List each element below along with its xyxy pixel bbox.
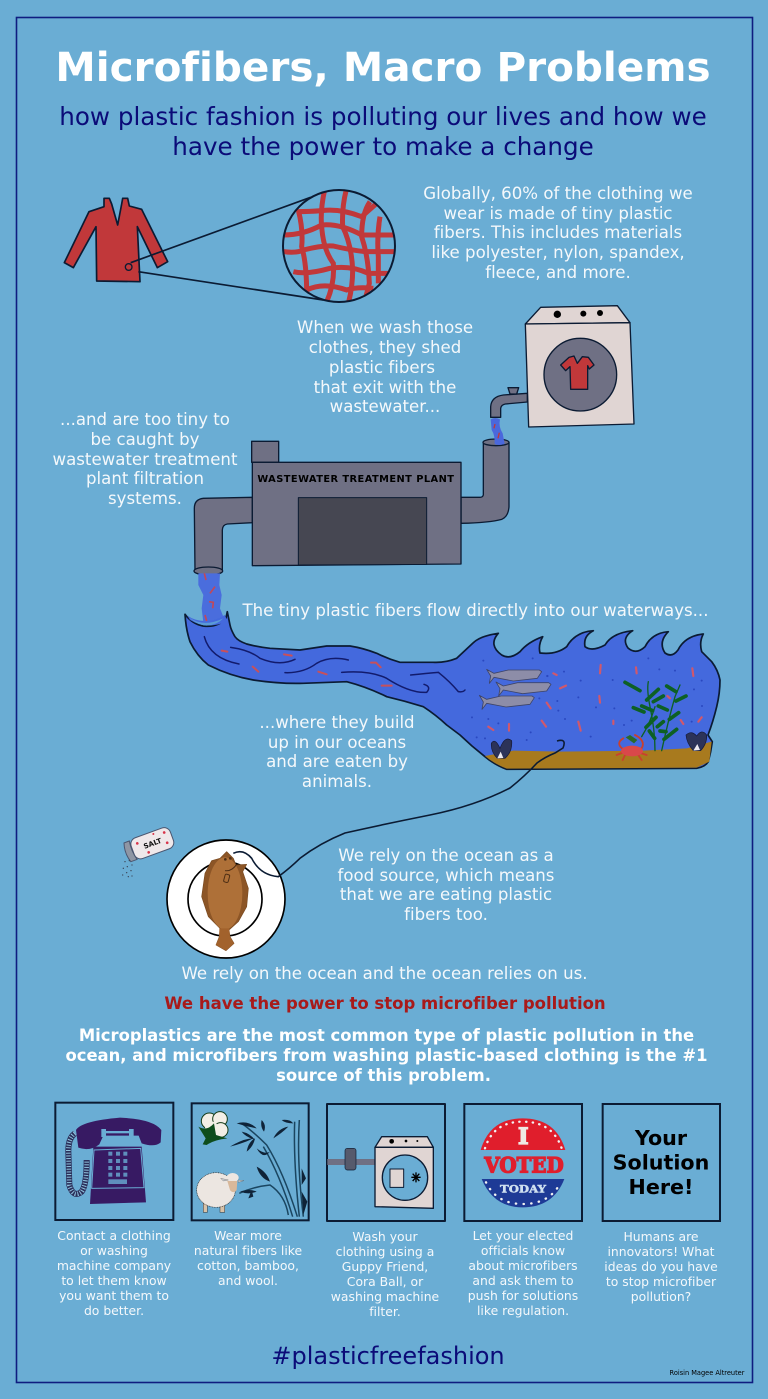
text: 60 percent of clothing: [423, 184, 693, 282]
caption: innovators: [604, 1229, 718, 1304]
water currents: [204, 637, 465, 692]
fishing line: [233, 740, 564, 877]
text: too tiny to be caught: be caught by: [90, 430, 200, 449]
text: ocean as food source: [338, 846, 554, 924]
sea floor: [485, 742, 712, 769]
icon: bamboo: [230, 1120, 307, 1217]
text: tiny fibers flow: The tiny plastic fibers flow directly into our waterways...: [241, 601, 709, 620]
caption: natural fibers: natural fibers like: [194, 1243, 302, 1258]
text: 60 percent of clothing: fibers. This includes materials: [434, 223, 682, 242]
ocean details: [471, 657, 712, 769]
subtitle: have the power to make a change: [172, 132, 594, 161]
caption: wash filter: [331, 1229, 439, 1319]
illustration: plate and flatfish: [167, 840, 285, 958]
text: too tiny to be caught: systems.: [108, 489, 182, 508]
caption: wash filter: clothing using a: [336, 1244, 434, 1259]
key fact: source of this problem.: [276, 1066, 491, 1085]
text: too tiny to be caught: ...and are too tiny to: [60, 410, 230, 429]
key fact: Microplastics are the most common type of plastic pollution in the: [79, 1026, 694, 1045]
action: I voted sticker: VOTED: [483, 1153, 564, 1178]
key fact: ocean, and microfibers from washing plastic-based clothing is the #1: [65, 1046, 708, 1065]
text: ocean as food source: food source, which means: [338, 866, 554, 885]
text: 60 percent of clothing: like polyester, nylon, spandex,: [431, 243, 685, 262]
text: washing sheds fibers: plastic fibers: [329, 358, 435, 377]
action: I voted sticker: [464, 1104, 582, 1221]
text: ocean relies on us: We rely on the ocean and the ocean relies on us.: [181, 964, 588, 983]
icon: cotton: [198, 1112, 228, 1145]
text: too tiny to be caught: wastewater treatment: [53, 450, 238, 469]
caption: contact company: or washing: [80, 1243, 148, 1258]
action: phone: [55, 1103, 173, 1220]
river and ocean water: [185, 612, 720, 769]
caption: wash filter: Guppy Friend,: [342, 1259, 428, 1274]
caption: contact company: to let them know: [61, 1273, 167, 1288]
caption: wash filter: Cora Ball, or: [347, 1274, 424, 1289]
caption: wash filter: washing machine: [331, 1289, 439, 1304]
illustration: river and ocean: [185, 573, 720, 769]
hashtag: #plasticfreefashion: [271, 1342, 505, 1370]
caption: contact company: machine company: [57, 1258, 171, 1273]
illustration: salt: [122, 826, 176, 877]
subtitle: [59, 102, 707, 161]
text: build up in oceans: and are eaten by: [266, 752, 408, 771]
caption: innovators: innovators! What: [607, 1244, 715, 1259]
caption: elected officials: officials know: [481, 1243, 565, 1258]
caption: elected officials: and ask them to: [472, 1273, 574, 1288]
credit: Roisin Magee Altreuter: [670, 1369, 745, 1377]
salt grains: [122, 860, 133, 877]
caption: elected officials: [468, 1228, 578, 1318]
caption: contact company: [57, 1228, 171, 1318]
caption: contact company: do better.: [84, 1303, 144, 1318]
text: build up in oceans: animals.: [302, 772, 372, 791]
text: too tiny to be caught: [53, 410, 238, 508]
caption: natural fibers: [194, 1228, 302, 1288]
text: build up in oceans: ...where they build: [259, 713, 415, 732]
microplastic dots: [471, 657, 703, 741]
icon: wastewater plant: [194, 439, 509, 575]
text: 60 percent of clothing: Globally, 60% of the clothing we: [423, 184, 693, 203]
caption: wash filter: Wash your: [352, 1229, 418, 1244]
waterfall with splash: [187, 573, 227, 626]
text: too tiny to be caught: plant filtration: [86, 469, 204, 488]
icon: flatfish: [202, 852, 248, 951]
action: natural fibers: [192, 1103, 309, 1220]
action: washing filter: [327, 1104, 445, 1221]
icon: washing machine: [525, 306, 634, 427]
icon: drain tap: [491, 388, 527, 417]
action: I voted sticker: TODAY: [500, 1182, 546, 1195]
subtitle: how plastic fashion is polluting our lives and how we: [59, 102, 707, 131]
caption: wash filter: filter.: [369, 1304, 401, 1319]
action: your solution: [603, 1104, 720, 1221]
river details: [187, 573, 465, 692]
text: ocean as food source: that we are eating plastic: [340, 885, 552, 904]
action: your solution: Your: [634, 1126, 688, 1150]
illustration: washing machine and treatment plant: [194, 306, 634, 575]
text: ocean as food source: fibers too.: [404, 905, 488, 924]
icon: sheep: [197, 1173, 244, 1212]
text: washing sheds fibers: clothes, they shed: [309, 338, 461, 357]
river fibers: [222, 651, 392, 686]
mussels: [491, 732, 707, 758]
fish: [479, 669, 551, 709]
call to action: We have the power to stop microfiber pollution: [164, 994, 606, 1013]
caption: contact company: Contact a clothing: [57, 1228, 171, 1243]
crab: [617, 735, 647, 760]
action: your solution: Solution: [613, 1151, 709, 1175]
text: washing sheds fibers: wastewater...: [330, 397, 440, 416]
text: build up in oceans: up in our oceans: [268, 733, 406, 752]
title: Microfibers, Macro Problems: [55, 43, 711, 91]
action: I voted sticker: I: [518, 1124, 529, 1150]
action: your solution: Here!: [629, 1175, 693, 1199]
plastic fibers: [488, 665, 702, 731]
text: washing sheds fibers: When we wash those: [297, 318, 473, 337]
caption: elected officials: push for solutions: [468, 1288, 578, 1303]
text: build up in oceans: [259, 713, 415, 791]
caption: elected officials: like regulation.: [477, 1303, 569, 1318]
text: washing sheds fibers: [297, 318, 473, 416]
icon: wastewater plant: WASTEWATER TREATMENT PLANT: [257, 474, 454, 485]
text: washing sheds fibers: that exit with the: [314, 378, 456, 397]
text: 60 percent of clothing: fleece, and more.: [485, 263, 631, 282]
caption: innovators: to stop microfiber: [606, 1274, 717, 1289]
icon: shirt with magnified fibers: [64, 188, 397, 303]
key fact: [65, 1026, 708, 1085]
caption: elected officials: about microfibers: [468, 1258, 578, 1273]
caption: innovators: ideas do you have: [604, 1259, 718, 1274]
caption: natural fibers: and wool.: [218, 1273, 278, 1288]
text: ocean as food source: We rely on the ocean as a: [338, 846, 554, 865]
caption: natural fibers: Wear more: [214, 1228, 282, 1243]
text: 60 percent of clothing: wear is made of tiny plastic: [443, 204, 673, 223]
caption: natural fibers: cotton, bamboo,: [197, 1258, 299, 1273]
icon: salt shaker: SALT: [143, 837, 163, 851]
water drip with fibers: [491, 418, 505, 445]
caption: innovators: pollution?: [631, 1289, 691, 1304]
seaweed: [625, 682, 686, 751]
caption: elected officials: Let your elected: [473, 1228, 573, 1243]
caption: innovators: Humans are: [623, 1229, 699, 1244]
icon: plate: [167, 840, 285, 958]
caption: contact company: you want them to: [59, 1288, 169, 1303]
